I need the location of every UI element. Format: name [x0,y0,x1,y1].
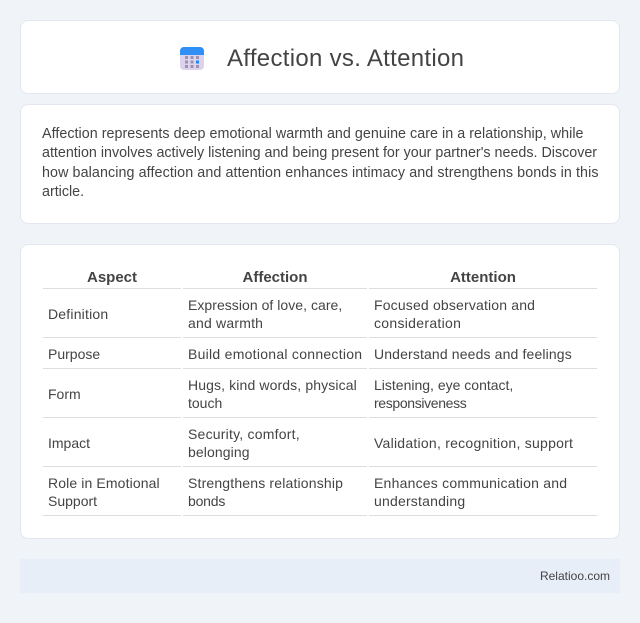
intro text: Affection represents deep emotional warmth and genuine care in a relationship, while [42,126,584,142]
column headers [87,269,516,286]
row: impact: belonging [188,444,250,460]
row: definition: Focused observation and [374,297,535,313]
footer brand: Relatioo.com [540,569,610,583]
row: role in emotional support: Strengthens relationship [188,475,343,491]
intro text: how balancing affection and attention enhances intimacy and strengthens bonds in this [42,165,599,181]
row: role in emotional support: understanding [374,493,465,509]
footer bar [20,559,620,593]
title: Affection vs. Attention [227,45,464,72]
row: definition: consideration [374,315,461,331]
column headers: Aspect [87,269,137,286]
row: role in emotional support: Enhances communication and [374,475,567,491]
row: definition: Definition [48,306,108,322]
row: form: touch [188,395,222,411]
row: role in emotional support: Role in Emotional [48,475,160,491]
column headers: Attention [450,269,516,286]
row: form [48,377,513,411]
row: form: responsiveness [374,395,466,411]
icon: calendar [180,47,204,70]
row: role in emotional support [48,475,567,509]
row: definition [48,297,535,331]
panel: introduction [20,104,620,224]
row: impact: Impact [48,435,90,451]
row: definition: and warmth [188,315,263,331]
row: form: Listening, eye contact, [374,377,513,393]
column headers: Affection [242,269,308,286]
row: purpose: Build emotional connection [188,346,362,362]
row: impact: Security, comfort, [188,426,300,442]
row: impact [48,426,573,460]
row: impact: Validation, recognition, support [374,435,573,451]
intro text: attention involves actively listening and being present for your partner's needs. Discover [42,145,597,161]
intro text: article. [42,184,84,200]
row: role in emotional support: Support [48,493,97,509]
row: form: Form [48,386,81,402]
row: form: Hugs, kind words, physical [188,377,357,393]
panel: header [20,20,620,94]
intro text [42,126,599,200]
panel: comparison table [20,244,620,539]
row: definition: Expression of love, care, [188,297,342,313]
row: purpose: Purpose [48,346,100,362]
row: role in emotional support: bonds [188,493,225,509]
row: purpose: Understand needs and feelings [374,346,572,362]
row: purpose [48,346,572,362]
